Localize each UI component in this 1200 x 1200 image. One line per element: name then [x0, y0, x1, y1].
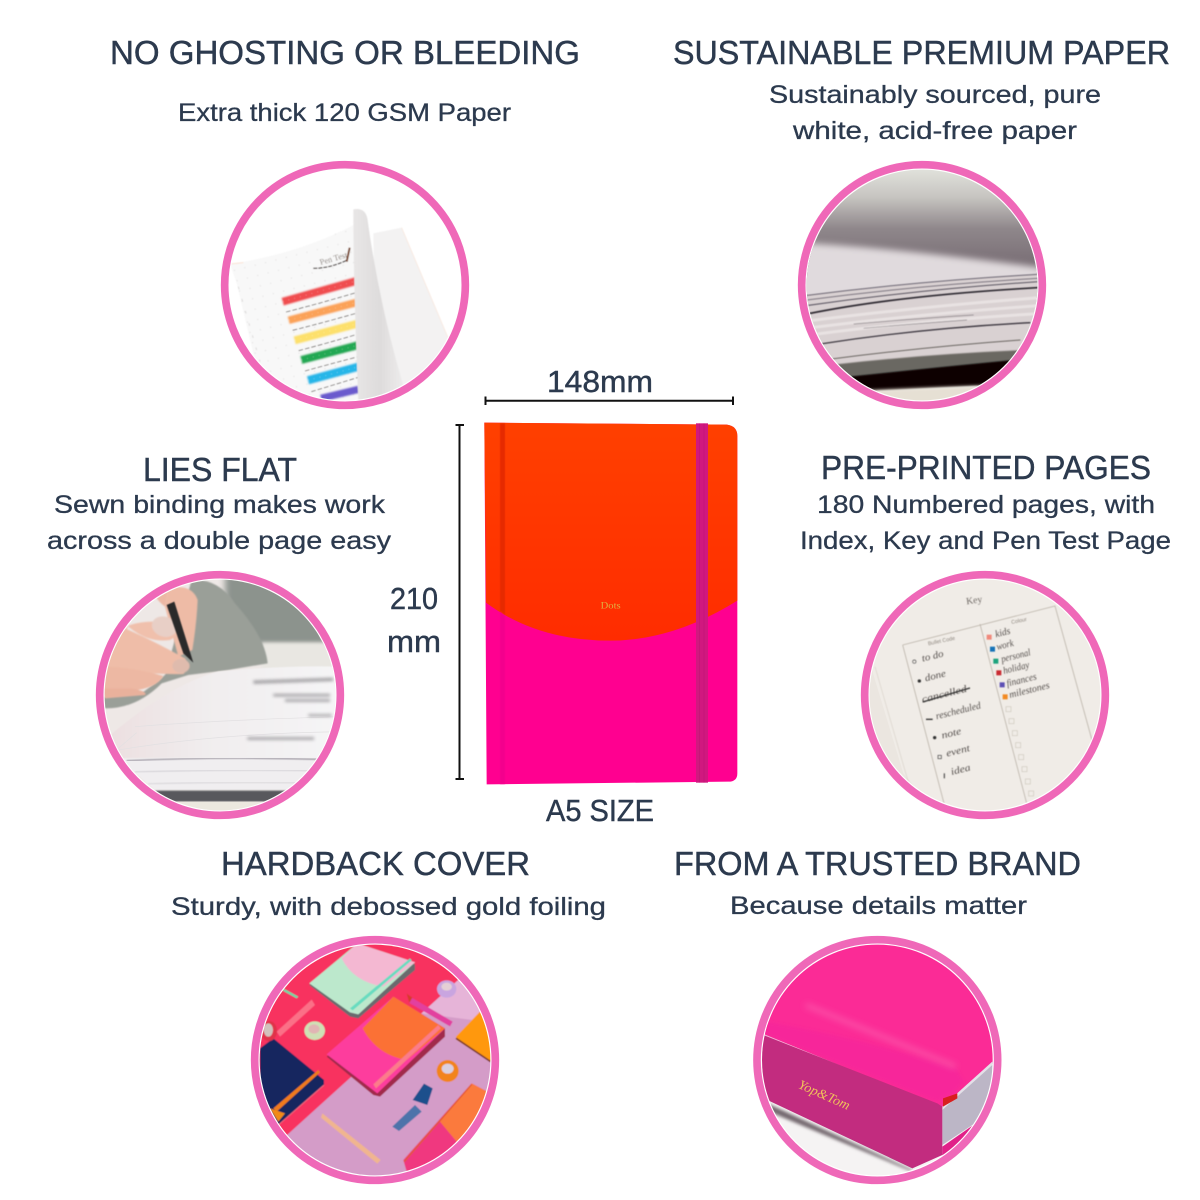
heading: hardback cover: HARDBACK COVER [221, 845, 530, 882]
photo: paper edge close-up in pink ring [787, 163, 1057, 407]
photo: key page in pink ring: Colour [1011, 617, 1028, 626]
navy notebook [260, 1038, 324, 1125]
hand [102, 580, 198, 698]
text: sturdy: Sturdy, with debossed gold foiling [171, 893, 606, 921]
photo: key page in pink ring: Bullet Code [928, 636, 956, 647]
text: numbered pages: Index, Key and Pen Test Page [800, 527, 1171, 555]
text: sewn binding [47, 491, 392, 555]
heading: lies flat: LIES FLAT [143, 451, 297, 488]
colour key list: milestones [1008, 680, 1051, 701]
bullet code list: done [924, 668, 948, 684]
orange notebook [456, 1012, 490, 1062]
cover: orange upper section [484, 423, 737, 641]
label: pen test: Pen Test [319, 250, 349, 267]
text: extra thick paper: Extra thick 120 GSM Paper [178, 99, 511, 127]
brand lettering: Yop&Tom [796, 1077, 853, 1113]
text: sewn binding: across a double page easy [47, 527, 392, 555]
notebook: A5 cover [484, 423, 737, 784]
colour key list [987, 626, 1051, 796]
text: numbered pages [800, 491, 1171, 555]
bullet code list: note [940, 726, 963, 742]
photo: pen test page in pink ring [220, 160, 470, 410]
bullet code list: event [945, 743, 971, 760]
dimension: width 148mm: 148mm [547, 364, 653, 399]
heading: no ghosting or bleeding: NO GHOSTING OR BLEEDING [110, 34, 580, 71]
text: details matter: Because details matter [730, 892, 1027, 920]
heading: sustainable premium paper: SUSTAINABLE PREMIUM PAPER [673, 34, 1170, 71]
dimension: height 210 mm: mm [387, 624, 441, 659]
label: Dots: Dots [601, 600, 621, 611]
dimension: height 210 mm: 210 [390, 581, 438, 616]
bullet code list: rescheduled [935, 700, 983, 722]
text: numbered pages: 180 Numbered pages, with [817, 491, 1155, 519]
washi tape rolls [261, 980, 459, 1131]
text: sewn binding: Sewn binding makes work [54, 491, 386, 519]
colour key list: work [995, 638, 1015, 653]
open page [108, 666, 342, 758]
sweater [102, 580, 268, 708]
bullet code list: to do [921, 649, 945, 665]
pink and orange notebook [326, 1028, 446, 1097]
photo: flat lay of notebooks in pink ring [250, 936, 500, 1184]
bullet code list [913, 649, 983, 778]
bullet code list: idea [950, 762, 972, 778]
elastic band [696, 423, 708, 783]
heading: pre-printed pages: PRE-PRINTED PAGES [821, 449, 1151, 486]
bullet code list: cancelled [921, 683, 969, 706]
colour key list: finances [1005, 671, 1038, 690]
heading: from a trusted brand: FROM A TRUSTED BRAND [674, 845, 1081, 882]
colour key list: holiday [1002, 660, 1031, 677]
bottom-right notebook [403, 1092, 464, 1171]
key title: Key [966, 594, 983, 607]
dimension: height 210 mm [387, 425, 464, 779]
text: A5 size: A5 SIZE [546, 793, 654, 828]
photo: key page in pink ring [860, 570, 1110, 820]
photo: pink cover and spine in pink ring [753, 936, 1002, 1184]
text: sustainably sourced: white, acid-free paper [792, 117, 1077, 145]
colour key list: personal [999, 647, 1032, 665]
text: sustainably sourced: Sustainably sourced, pure [769, 81, 1101, 109]
photo: hand writing in flat notebook in pink ring [96, 570, 344, 820]
mint notebook [309, 964, 416, 1019]
dimension: width 148mm [486, 364, 733, 405]
colour key list: kids [994, 626, 1012, 640]
text: sustainably sourced [769, 81, 1101, 145]
pens [409, 998, 453, 1026]
